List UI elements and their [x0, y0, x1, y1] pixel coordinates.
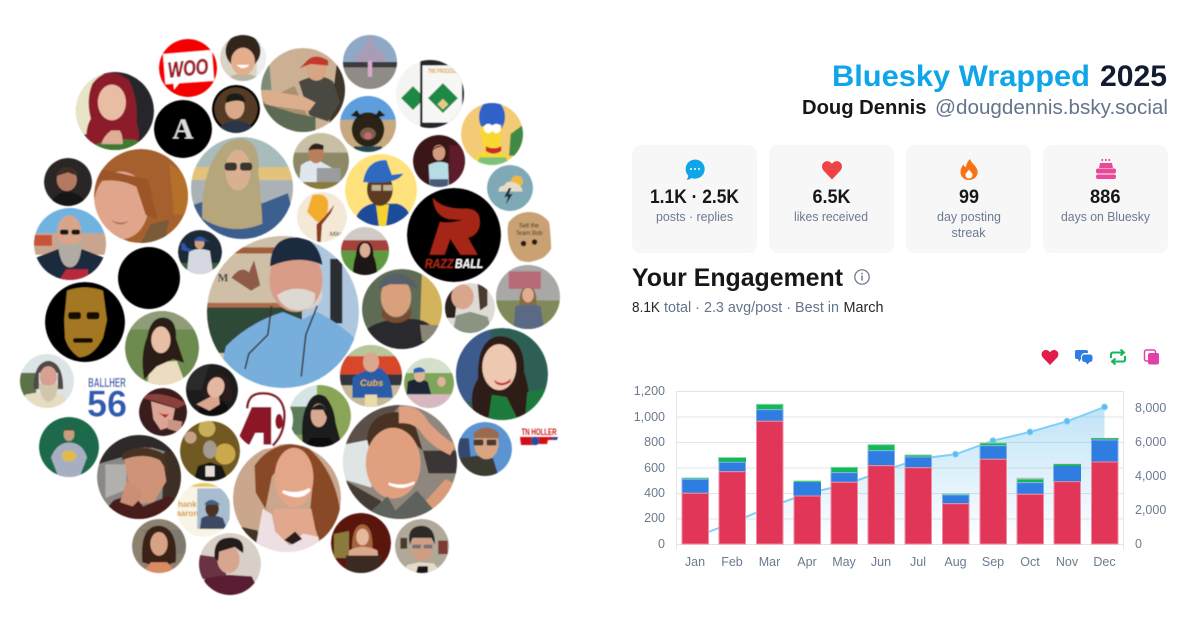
avatar: TN Holler logo: TN HOLLER [522, 427, 557, 438]
avatar: ballher 56 logo: BALLHER [88, 375, 126, 390]
title: Bluesky Wrapped [832, 60, 1090, 93]
stacked bars [682, 404, 1118, 544]
icon: info [855, 270, 869, 284]
avatar: sell the team bob bag: Sell the [519, 224, 540, 230]
bar: Sep [980, 443, 1006, 544]
avatar: dodgers pitcher [178, 230, 222, 274]
avatar: yellow cartoon head [297, 192, 347, 242]
panel: posts and replies [632, 145, 757, 253]
panel: likes received [769, 145, 894, 253]
avatar: A logo: A [173, 113, 194, 145]
avatar: woman at ballpark [496, 265, 560, 329]
avatar: man in blue cubs shirt: Cubs [360, 378, 383, 388]
bar: Feb [719, 458, 746, 544]
avatar: big smiling woman, hand in hair [343, 405, 457, 519]
month labels [685, 555, 1116, 569]
avatar: the process book: THE PROCESS [428, 68, 457, 75]
avatar: man with typewriter [293, 133, 349, 189]
engagement bar and line chart [634, 384, 1166, 569]
avatar: storm weather [487, 165, 533, 211]
icon: chat bubble [686, 159, 705, 180]
right axis labels: 4,000 [1135, 469, 1166, 483]
avatar: woman with long dark hair, green shirt [456, 328, 548, 420]
panel: day posting streak: 99 [959, 187, 979, 208]
icon: legend replies [1075, 350, 1092, 364]
avatar: man in grey hat [362, 269, 442, 349]
avatar: curly man [220, 34, 266, 81]
avatar: A headset logo [235, 391, 293, 449]
month labels: Feb [721, 555, 743, 569]
profile name and handle [802, 97, 1168, 119]
icon: flame [960, 159, 978, 180]
icon: cake [1096, 159, 1116, 179]
bar: Oct [1017, 478, 1044, 544]
avatar: ballher 56 logo: 56 [87, 383, 127, 425]
avatar: castle [343, 35, 397, 89]
bar: Nov [1054, 464, 1080, 544]
avatar: pixel face [45, 282, 125, 362]
month labels: Jun [871, 555, 891, 569]
avatar: black blank [118, 247, 180, 309]
bar: May [831, 467, 858, 544]
right axis labels [1135, 401, 1166, 551]
month labels: Sep [982, 555, 1004, 569]
icon: legend quotes [1144, 350, 1159, 364]
month labels: Mar [759, 555, 780, 569]
avatar: man with computer and red cap [261, 48, 345, 132]
panel: likes received: 6.5K [812, 187, 851, 208]
month labels: Oct [1020, 555, 1040, 569]
avatar: family at table [404, 358, 454, 408]
avatar: man with glasses and blue background [458, 422, 512, 476]
heading: your engagement: Your Engagement [632, 264, 844, 292]
avatar: woman in olive jacket [445, 283, 495, 333]
avatar: the process book [396, 60, 464, 128]
avatar: cartoon man in yellow circle [345, 154, 417, 226]
left axis labels: 200 [644, 511, 665, 525]
right axis labels: 0 [1135, 537, 1142, 551]
panel: posts and replies: 1.1K · 2.5K [650, 187, 739, 208]
icon: heart [822, 161, 842, 180]
panel: days on Bluesky [1043, 145, 1168, 253]
cumulative line [695, 404, 1108, 537]
avatar: woman with black hair outdoors [289, 385, 351, 447]
avatar: redheaded woman close-up [94, 149, 188, 243]
avatar: woman in cream top [125, 311, 199, 385]
avatar: marge cartoon [461, 100, 523, 165]
panel: days on Bluesky: days on Bluesky [1061, 209, 1150, 224]
left axis labels: 800 [644, 435, 665, 449]
avatar: razzball logo [407, 188, 501, 282]
avatar: razzball logo: BALL [455, 256, 483, 271]
right axis labels: 6,000 [1135, 435, 1166, 449]
icon: legend reposts [1111, 350, 1125, 364]
panel: day posting streak: day posting [937, 209, 1001, 224]
bar: Dec [1092, 438, 1118, 544]
avatar: sell the team bob bag [508, 212, 551, 263]
profile name and handle: @dougdennis.bsky.social [935, 97, 1168, 119]
avatar: curly-haired woman [132, 519, 186, 573]
avatar: hank aaron poster: aaron [176, 509, 198, 518]
left axis labels: 600 [644, 461, 665, 475]
right axis labels: 8,000 [1135, 401, 1166, 415]
avatar: A logo [154, 100, 212, 158]
avatar: yellow cartoon head: Mike [330, 231, 344, 238]
avatar: man with glasses, messy hair [395, 519, 449, 573]
panel: day posting streak [906, 145, 1031, 253]
panel: days on Bluesky: 886 [1090, 187, 1120, 208]
bar: Jun [868, 445, 894, 544]
left axis labels: 1,000 [634, 410, 665, 424]
avatar: bearded man with long hair [20, 354, 74, 408]
avatar: hank aaron poster: hank [178, 500, 197, 509]
month labels: Apr [797, 555, 817, 569]
avatar: ballher 56 logo [78, 368, 136, 426]
avatar cluster [20, 34, 560, 595]
avatar: big woman with auburn hair [233, 444, 341, 552]
month labels: Jan [685, 555, 705, 569]
panel: likes received: likes received [794, 209, 868, 224]
cumulative area [695, 407, 1104, 544]
bar: Jan [682, 478, 708, 544]
avatar: woman with dark hair and necklace [186, 364, 238, 416]
panel: posts and replies: posts · replies [656, 209, 733, 224]
avatar: woman with red lips and hat [139, 388, 187, 436]
chart legend [1042, 350, 1159, 365]
icon: legend heart [1042, 350, 1058, 365]
avatar: dog at the beach [340, 96, 396, 152]
avatar: dark-suited man [212, 85, 260, 133]
left axis labels: 0 [658, 537, 665, 551]
avatar: concert singer [413, 135, 465, 187]
avatar: woman in burgundy [199, 533, 261, 595]
avatar: large central man in blue shirt: M [218, 273, 229, 285]
avatar: figurine by Christmas tree [180, 420, 240, 481]
avatar: woo: WOO [167, 54, 210, 83]
engagement summary: 8.1K [632, 300, 660, 316]
avatar: large central man in blue shirt [207, 236, 359, 388]
month labels: May [832, 555, 857, 569]
avatar: red hair woman [76, 72, 154, 150]
engagement summary: total · 2.3 avg/post · Best in [664, 300, 839, 316]
bar: Apr [794, 481, 820, 544]
left axis labels: 400 [644, 486, 665, 500]
right axis labels: 2,000 [1135, 503, 1166, 517]
month labels: Aug [944, 555, 967, 569]
avatar: bald bearded man in sunglasses [34, 208, 106, 280]
bar: Jul [905, 455, 932, 544]
avatar: TN Holler logo [520, 427, 558, 445]
title: 2025 [1100, 60, 1167, 93]
avatar: sell the team bob bag: Team Bob [515, 231, 543, 237]
month labels: Jul [910, 555, 926, 569]
avatar: blonde woman with sunglasses [191, 137, 293, 239]
avatar: man in blue cubs shirt [340, 345, 402, 407]
left axis labels: 1,200 [634, 384, 665, 398]
avatar: woman with hand on chin [97, 435, 181, 519]
bar: Mar [756, 404, 783, 544]
month labels: Nov [1056, 555, 1079, 569]
avatar: woman at stadium [341, 227, 389, 275]
panel: day posting streak: streak [952, 225, 986, 240]
month labels: Dec [1093, 555, 1116, 569]
avatar: man in dark shirt [44, 158, 92, 206]
avatar: woo [159, 39, 217, 97]
gridlines [676, 392, 1124, 549]
avatar: hank aaron poster [176, 483, 231, 537]
avatar: baseball card player [39, 417, 99, 477]
left axis labels [634, 384, 665, 551]
avatar: razzball logo: RAZZ [425, 256, 454, 271]
bar: Aug [942, 494, 969, 544]
engagement summary: March [844, 300, 884, 316]
profile name and handle: Doug Dennis [802, 97, 926, 119]
avatar: woman in red room [331, 513, 391, 573]
